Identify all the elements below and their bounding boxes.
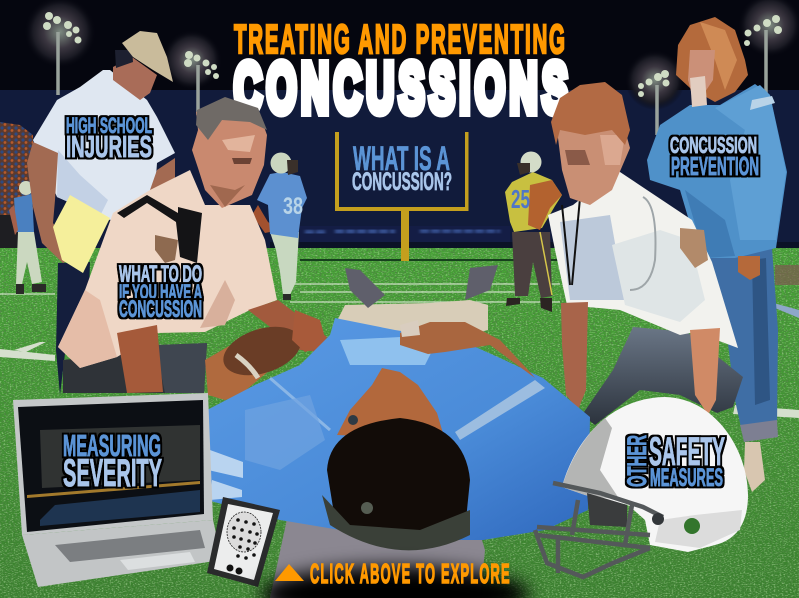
screen orange band <box>27 481 200 498</box>
label second line: SEVERITY <box>63 452 162 495</box>
crowd in stands <box>0 122 33 260</box>
medic bag strap <box>117 195 202 263</box>
label: what is a concussion: WHAT IS A <box>353 140 450 178</box>
call to action text: CLICK ABOVE TO EXPLORE <box>310 557 510 589</box>
label MEASURES: MEASURES <box>650 464 723 492</box>
player shoe right <box>465 265 498 300</box>
football helmet <box>535 397 748 577</box>
label: what to do if you have a concussion <box>119 261 202 323</box>
title line 2: CONCUSSIONS <box>234 49 568 127</box>
kneeling medic man <box>58 97 327 393</box>
stadium lights <box>24 0 799 135</box>
label line two: IF YOU HAVE A <box>119 281 202 304</box>
woman sweatshirt <box>647 84 787 258</box>
label: what is a concussion <box>352 140 452 196</box>
player hand on chest <box>400 322 535 378</box>
medic forearms <box>117 325 163 393</box>
woman hand at chin <box>690 76 707 107</box>
laptop lid <box>13 393 213 535</box>
title <box>234 16 568 127</box>
helmet ear hole <box>684 518 700 534</box>
up arrow icon <box>275 564 304 581</box>
coach cap <box>122 31 173 82</box>
coach hair <box>115 50 133 68</box>
screen waveform panel <box>40 425 200 488</box>
player number 25: 25 <box>511 184 530 214</box>
medic shoulder patch <box>155 235 178 263</box>
kneeling female medic <box>548 82 743 425</box>
label: other safety measures <box>622 430 725 492</box>
player pants <box>335 300 488 345</box>
small player far left <box>9 181 46 294</box>
coach face <box>113 57 157 100</box>
player jersey <box>207 318 590 540</box>
medic head <box>192 98 267 208</box>
label second line: CONCUSSION? <box>352 168 452 196</box>
pillow <box>270 480 485 598</box>
title line 1: TREATING AND PREVENTING <box>234 16 565 62</box>
helmet mask block <box>587 493 627 527</box>
label: high school injuries: HIGH SCHOOL <box>66 113 152 138</box>
label: measuring severity <box>63 428 162 495</box>
player number 25 <box>505 152 562 312</box>
female medic patch <box>680 228 708 268</box>
coach with clipboard <box>27 31 175 395</box>
woman jeans <box>708 248 778 432</box>
medic shirt <box>58 170 277 368</box>
football field <box>0 248 799 598</box>
player face <box>337 368 445 440</box>
label: what to do if you have a concussion: WHAT TO DO <box>119 261 202 288</box>
downed player <box>205 265 590 598</box>
coach clipboard <box>53 195 110 273</box>
coach trousers <box>56 262 90 395</box>
eeg tablet device <box>207 497 280 587</box>
tablet head diagram <box>227 512 261 552</box>
laptop screen <box>18 400 204 532</box>
laptop <box>13 393 222 587</box>
player shoe left <box>345 268 385 308</box>
female medic shirt <box>548 170 738 348</box>
label second line: INJURIES <box>66 129 152 164</box>
woman face <box>688 50 715 95</box>
female medic arms <box>561 302 588 410</box>
coach arms <box>27 142 75 263</box>
female medic jeans <box>582 327 743 425</box>
label: high school injuries <box>66 113 152 164</box>
woman hair <box>676 17 748 102</box>
vertical label OTHER: OTHER <box>622 435 652 487</box>
laptop base <box>22 520 222 587</box>
night sky <box>0 0 799 90</box>
female medic head <box>557 125 630 205</box>
bottom dark vignette <box>260 566 530 598</box>
left arm and football <box>205 310 327 400</box>
stadium backdrop <box>0 90 799 255</box>
woman sleeve hand <box>738 256 760 280</box>
player number 38 <box>252 152 307 300</box>
screen spectrum <box>40 490 200 526</box>
label: measuring severity: MEASURING <box>63 428 161 463</box>
label line three: CONCUSSION <box>119 296 202 323</box>
click call to action <box>275 557 510 589</box>
player number 38: 38 <box>283 193 303 220</box>
woman in blue sweatshirt <box>647 17 787 492</box>
label: concussion prevention <box>670 132 759 181</box>
medic jeans <box>63 343 207 393</box>
distant stadium skyline <box>270 226 799 248</box>
jersey number <box>208 450 243 500</box>
player hair <box>327 418 470 543</box>
player helmet band <box>322 495 470 550</box>
goal post <box>335 132 468 261</box>
helmet face mask <box>535 483 663 577</box>
female medic stethoscope <box>630 197 656 290</box>
helmet shell <box>562 397 748 552</box>
coach shirt <box>33 70 175 220</box>
